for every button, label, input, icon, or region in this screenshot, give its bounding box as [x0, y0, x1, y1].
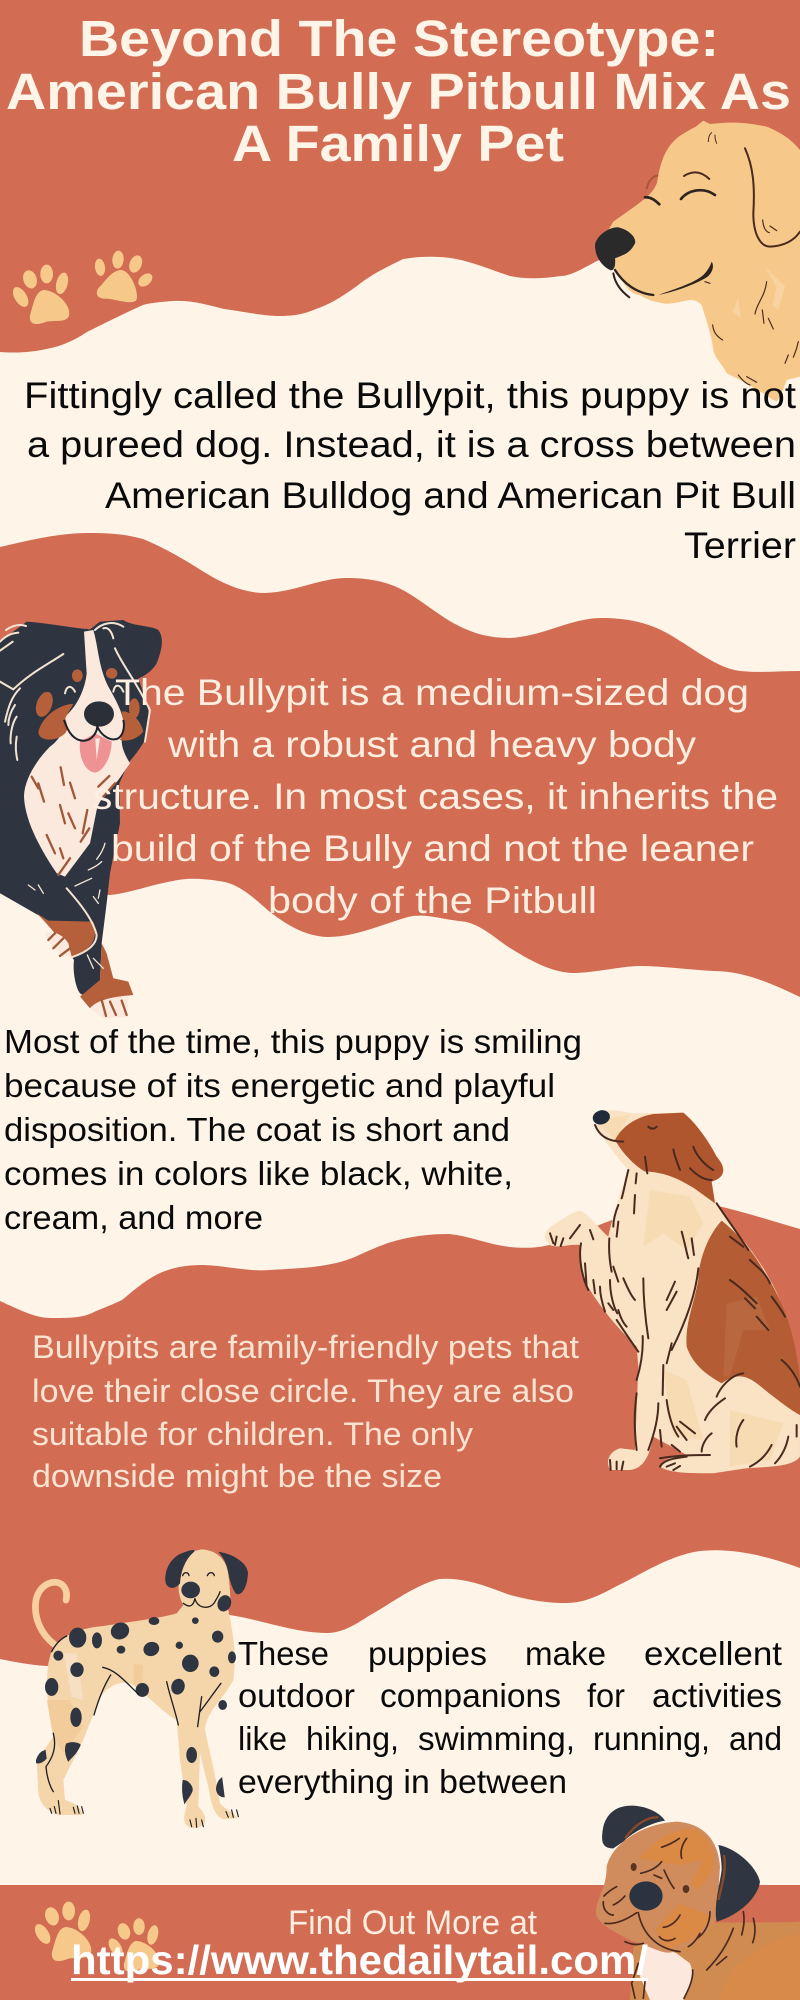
text block: size and build paragraph: The Bullypit is a medium-sized dog	[115, 672, 749, 713]
text block: family paragraph: downside might be the size	[32, 1458, 442, 1494]
icon: boxer dog	[596, 1806, 800, 2000]
text block: size and build paragraph: with a robust and heavy body	[167, 724, 697, 765]
text block: outdoor paragraph: companions	[380, 1678, 561, 1715]
title: A Family Pet	[232, 115, 564, 172]
text block: intro paragraph: Terrier	[684, 525, 796, 566]
icon: top paw right	[94, 250, 155, 302]
text block: outdoor paragraph: running,	[593, 1721, 710, 1758]
text block: outdoor paragraph: hiking,	[306, 1721, 399, 1758]
text block: size and build paragraph: body of the Pitbull	[268, 880, 597, 921]
text block: intro paragraph: American Bulldog and American Pit Bull	[105, 475, 796, 516]
text block: intro paragraph: Fittingly called the Bullypit, this puppy is not	[24, 375, 797, 416]
text block: temperament paragraph: disposition. The coat is short and	[4, 1112, 510, 1149]
panel: footer band	[0, 1885, 800, 2000]
text block: outdoor paragraph: for	[587, 1678, 625, 1715]
text block: family paragraph	[32, 1329, 579, 1494]
text block: temperament paragraph: cream, and more	[4, 1200, 263, 1237]
text block: intro paragraph	[24, 375, 797, 566]
text block: size and build paragraph: build of the Bully and not the leaner	[111, 828, 754, 869]
footer call to action: https://www.thedailytail.com/	[71, 1937, 648, 1983]
text block: outdoor paragraph: activities	[652, 1678, 782, 1715]
icon: footer paw left	[32, 1902, 92, 1961]
icon: top paw left	[10, 265, 70, 324]
icon: bernese dog	[0, 620, 162, 1018]
panel: top wave band	[0, 0, 800, 353]
text block: outdoor paragraph: These	[238, 1636, 329, 1673]
text block: outdoor paragraph: puppies	[368, 1636, 487, 1673]
footer call to action: Find Out More at	[288, 1904, 537, 1942]
title: Beyond The Stereotype:	[79, 10, 719, 67]
text block: family paragraph: Bullypits are family-friendly pets that	[32, 1329, 579, 1365]
text block: temperament paragraph	[4, 1024, 582, 1237]
text block: outdoor paragraph: make	[525, 1636, 606, 1673]
text block: intro paragraph: a pureed dog. Instead, it is a cross between	[27, 424, 796, 465]
text block: family paragraph: love their close circle. They are also	[32, 1373, 574, 1409]
text block: outdoor paragraph: like	[238, 1721, 287, 1758]
text block: size and build paragraph: structure. In most cases, it inherits the	[92, 776, 778, 817]
title	[6, 10, 791, 172]
icon: golden dog head	[595, 121, 800, 402]
title: American Bully Pitbull Mix As	[6, 63, 791, 120]
text block: outdoor paragraph: outdoor	[238, 1678, 355, 1715]
text block: outdoor paragraph: everything in between	[238, 1764, 567, 1801]
text block: outdoor paragraph: and	[729, 1721, 782, 1758]
text block: family paragraph: suitable for children. The only	[32, 1416, 473, 1452]
text block: outdoor paragraph	[238, 1636, 783, 1801]
icon: dalmatian dog	[35, 1549, 247, 1828]
text block: size and build paragraph	[92, 672, 778, 921]
text block: outdoor paragraph: swimming,	[418, 1721, 575, 1758]
icon: collie dog	[545, 1108, 800, 1473]
text block: temperament paragraph: because of its energetic and playful	[4, 1068, 555, 1105]
panel: third wave band	[0, 1203, 800, 1666]
text block: outdoor paragraph: excellent	[644, 1636, 783, 1673]
footer call to action	[71, 1904, 648, 1983]
panel: second wave band	[0, 533, 800, 997]
text block: temperament paragraph: Most of the time, this puppy is smiling	[4, 1024, 582, 1061]
icon: footer paw right	[106, 1918, 160, 1972]
text block: temperament paragraph: comes in colors like black, white,	[4, 1156, 513, 1193]
